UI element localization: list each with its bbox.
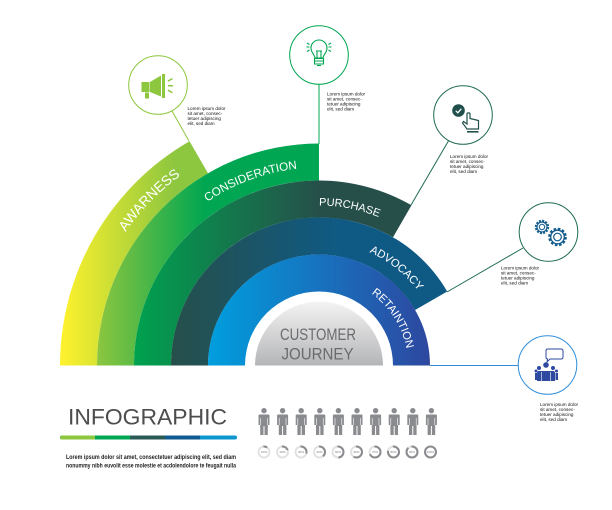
text: retention note: Lorem ipsum dolor <box>540 402 579 407</box>
segment: advocacy <box>171 218 448 366</box>
text: retention note: tetuer adipiscing <box>540 412 574 417</box>
percentage labels: 80% <box>390 450 397 454</box>
segment: consideration <box>97 144 319 366</box>
text: advocacy note: tetuer adipiscing <box>501 276 535 280</box>
percentage labels: 100% <box>427 450 435 454</box>
segment: purchase: PURCHASE <box>320 198 381 217</box>
percentage labels: 60% <box>353 450 360 454</box>
text: purchase note: Lorem ipsum dolor <box>450 154 489 159</box>
intro text: nonummy nibh euvolit esse molestie et acdolendolore te feugait nulla <box>66 462 236 470</box>
segment: consideration: CONSIDERATION <box>204 160 296 200</box>
centre badge: customer journey: CUSTOMER <box>280 326 356 344</box>
callout: consideration <box>290 26 348 84</box>
text: advocacy note: sit amet, consec- <box>501 270 536 276</box>
text: retention note: elit, sed diam <box>540 417 567 422</box>
text: awareness note: Lorem ipsum dolor <box>188 106 226 111</box>
segment: purchase <box>134 180 412 366</box>
percentage labels <box>261 450 435 454</box>
centre badge: customer journey <box>255 302 383 366</box>
intro text: Lorem ipsum dolor sit amet, consectetuer adipiscing elit, sed diam <box>66 454 236 461</box>
text: awareness note: tetuer adipiscing <box>188 116 221 121</box>
text: purchase note: sit amet, consec- <box>450 159 485 164</box>
icon: light bulb <box>306 40 332 66</box>
percentage labels: 90% <box>409 450 415 454</box>
percentage labels: 50% <box>335 450 341 454</box>
segment: awareness: AWARNESS <box>120 170 179 232</box>
icon: megaphone <box>142 74 173 98</box>
icon: hand with check <box>452 104 478 133</box>
percentage labels: 20% <box>279 450 286 454</box>
text: purchase note: tetuer adipiscing <box>450 164 484 169</box>
segment: awareness <box>60 141 208 366</box>
title colour bar <box>60 436 237 440</box>
segment: retention <box>208 254 430 366</box>
percentage rings <box>258 446 436 458</box>
callout: purchase <box>434 86 492 144</box>
text: consideration note: sit amet, consec- <box>327 96 362 102</box>
text: awareness note: sit amet, consec- <box>188 111 223 116</box>
percentage labels: 10% <box>261 450 267 454</box>
text: awareness note: elit, sed diam <box>188 121 215 126</box>
text: purchase note: elit, sed diam <box>450 169 477 174</box>
percentage labels: 30% <box>298 450 304 454</box>
text: consideration note: tetuer adipiscing <box>327 102 361 106</box>
connector lines <box>172 84 523 366</box>
segment: advocacy: ADVOCACY <box>369 246 424 288</box>
pictogram: people row <box>258 408 437 435</box>
segment: retention: RETAINTION <box>372 288 414 348</box>
text: consideration note: Lorem ipsum dolor <box>327 92 366 96</box>
callout: awareness <box>129 56 187 114</box>
text: advocacy note: Lorem ipsum dolor <box>501 266 540 270</box>
text: retention note: sit amet, consec- <box>540 407 575 412</box>
text: consideration note: elit, sed diam <box>327 106 354 112</box>
icon: gears <box>536 221 566 245</box>
title: INFOGRAPHIC <box>68 404 227 430</box>
centre badge: customer journey: JOURNEY <box>282 346 354 364</box>
percentage labels: 40% <box>316 450 323 454</box>
text: advocacy note: elit, sed diam <box>501 280 528 286</box>
callout: advocacy <box>519 203 578 261</box>
callout: retention <box>518 336 577 394</box>
icon: people with speech bubble <box>534 349 563 381</box>
percentage labels: 70% <box>372 450 378 454</box>
